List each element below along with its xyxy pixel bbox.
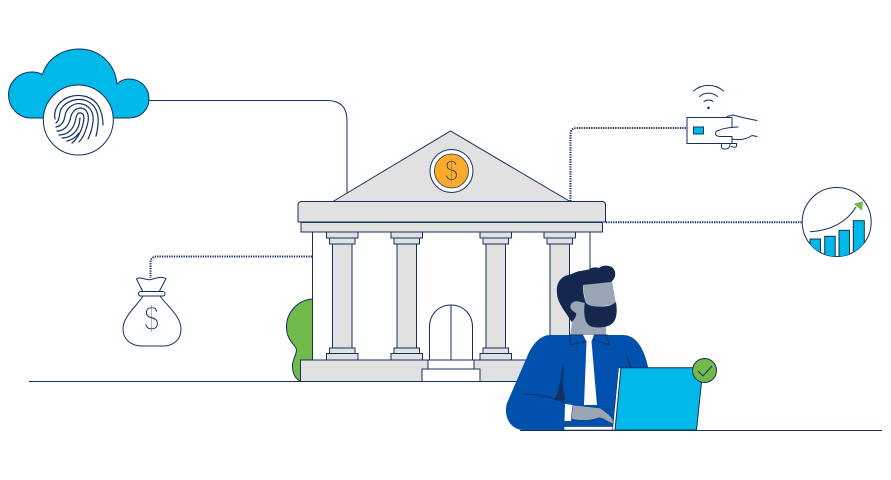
check badge xyxy=(692,358,716,382)
hair xyxy=(557,266,615,322)
icon: money bag xyxy=(123,277,181,346)
face xyxy=(583,281,616,308)
connector: cloud to bank xyxy=(148,100,347,196)
entablature xyxy=(298,202,606,222)
connector: card to bank xyxy=(570,128,686,201)
bag body xyxy=(123,296,181,346)
hand xyxy=(571,405,613,424)
trend arrow line xyxy=(810,207,856,232)
check mark xyxy=(698,366,712,376)
column 3 xyxy=(480,232,512,360)
dollar sign: $ xyxy=(445,153,458,188)
chip xyxy=(694,127,704,134)
beard xyxy=(584,301,617,328)
fingers xyxy=(722,144,736,149)
tie xyxy=(583,335,597,405)
column 1 xyxy=(326,232,358,360)
wifi waves xyxy=(694,85,724,109)
frieze xyxy=(301,222,602,232)
connector: chart to bank xyxy=(606,221,802,223)
shirt cuff xyxy=(564,404,573,421)
laptop xyxy=(615,368,703,430)
medallion xyxy=(430,150,473,192)
cloud xyxy=(8,49,149,118)
icon: cloud with fingerprint xyxy=(8,49,149,155)
bank building xyxy=(298,131,606,382)
fingerprint badge xyxy=(43,85,113,155)
collar left xyxy=(570,335,587,345)
ground line left xyxy=(29,380,512,382)
arrow head xyxy=(854,202,863,210)
icon: bush xyxy=(286,299,312,381)
ground line right xyxy=(520,430,882,432)
icon: contactless card xyxy=(687,85,757,149)
column 2 xyxy=(391,232,422,360)
illustration xyxy=(8,48,882,431)
lower step xyxy=(422,369,480,382)
torso xyxy=(506,335,648,430)
collar right xyxy=(592,335,609,345)
pediment xyxy=(333,131,570,202)
dollar sign: $ xyxy=(144,299,159,338)
wall xyxy=(312,232,590,360)
arm crease xyxy=(524,355,631,403)
bag band xyxy=(138,292,165,296)
arm shadow xyxy=(554,378,565,401)
hand xyxy=(716,115,757,140)
bag neck xyxy=(136,277,166,292)
icon: growth chart xyxy=(802,188,871,264)
fingerprint xyxy=(55,95,103,143)
platform xyxy=(300,360,540,382)
chart circle xyxy=(802,188,871,256)
person at laptop xyxy=(506,266,716,430)
laptop screen edge xyxy=(612,368,622,430)
column 4 xyxy=(544,232,576,348)
door xyxy=(430,305,472,360)
neck and ear xyxy=(569,300,606,337)
connector: money bag to bank xyxy=(150,256,312,278)
upper step xyxy=(428,360,474,369)
card xyxy=(687,118,732,144)
keyboard xyxy=(564,426,617,430)
bars xyxy=(810,220,865,256)
